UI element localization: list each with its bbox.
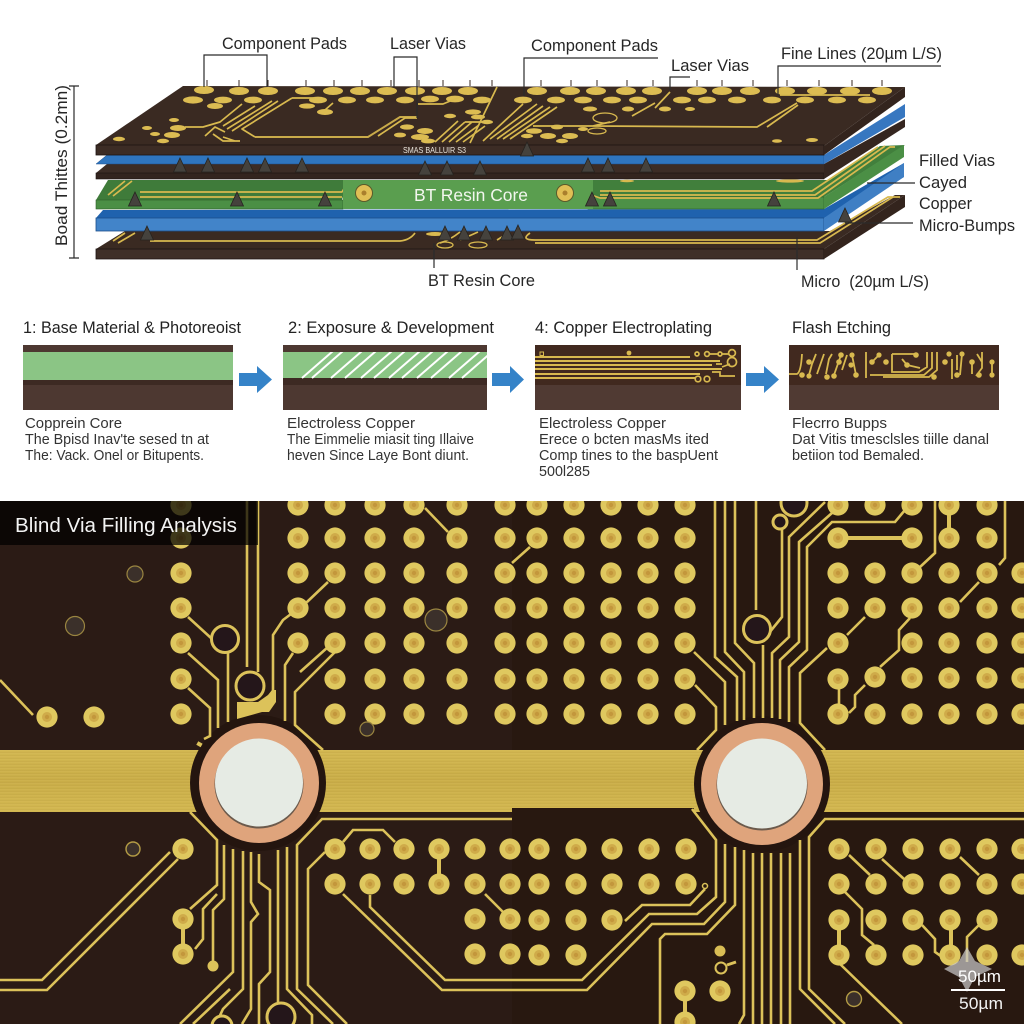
callout: BT resin core bottom: BT Resin Core — [428, 272, 535, 290]
tiny pins — [207, 80, 882, 86]
caption: step 3 — [539, 415, 719, 480]
layer: upper blue dielectric — [96, 104, 905, 164]
layer: bottom copper board — [96, 195, 905, 259]
callout: component pads left: Component Pads — [222, 35, 347, 53]
callout: micro-bumps: Micro-Bumps — [919, 217, 1015, 235]
heading: step 3: 4: Copper Electroplating — [535, 319, 712, 337]
callout: board thickness dimension — [52, 85, 79, 258]
caption: step 1: Copprein Core — [25, 415, 122, 432]
caption: step 3: Erece o bcten masMs ited — [539, 431, 709, 448]
heading: step 1: 1: Base Material & Photoreoist — [23, 319, 241, 337]
panel: step 3 — [535, 319, 741, 480]
callout: laser vias right — [670, 57, 749, 90]
label: filled vias: Filled Vias — [919, 152, 995, 170]
caption: step 3: Comp tines to the baspUent — [539, 447, 719, 464]
heading: step 4: Flash Etching — [792, 319, 891, 337]
caption: step 4 — [792, 415, 989, 464]
caption: step 3: 500l285 — [539, 463, 590, 480]
traces: upper right — [512, 490, 1005, 750]
caption: step 1 — [25, 415, 210, 464]
pads: upper right array — [526, 494, 1024, 725]
caption: step 4: Flecrro Bupps — [792, 415, 887, 432]
callout: component pads right — [524, 37, 658, 96]
layer: middle dark prepreg — [96, 119, 905, 179]
pads: upper left array — [36, 494, 516, 728]
callout: laser vias left — [390, 35, 466, 118]
arrow: step 2 to 3 — [492, 366, 524, 393]
arrow: step 1 to 2 — [239, 366, 272, 393]
traces: upper left — [0, 501, 448, 750]
label: copper: Copper — [919, 195, 973, 213]
layer: BT resin core green — [96, 145, 905, 209]
scale bar: 50µm — [959, 994, 1003, 1013]
via: filled blind via right — [701, 723, 823, 845]
arrow: step 3 to 4 — [746, 366, 779, 393]
diagram: step 4 etched traces — [789, 345, 999, 410]
scale bar — [951, 967, 1005, 1013]
callout: cayed — [867, 174, 967, 192]
label: BT Resin Core on core: BT Resin Core — [414, 185, 528, 205]
diagram: step 3 plated copper — [535, 345, 741, 410]
panel: step 1 — [23, 319, 241, 464]
scale bar: 50µm — [958, 967, 1001, 986]
via isolation rings — [190, 750, 830, 812]
callout: fine lines: Fine Lines (20µm L/S) — [781, 45, 942, 63]
title banner: Blind Via Filling Analysis — [15, 514, 237, 537]
callout: board thickness dimension: Boad Thittes (0.2mn) — [52, 85, 71, 246]
via defects upper left — [66, 566, 447, 736]
traces: lower right — [512, 809, 1024, 1024]
tiny board marking: SMAS BALLUIR S3 — [403, 146, 466, 155]
diagram: step 2 exposed photoresist — [283, 345, 493, 410]
caption: step 4: betiion tod Bemaled. — [792, 447, 924, 464]
callout: laser vias left: Laser Vias — [390, 35, 466, 53]
title banner — [0, 501, 258, 545]
layer: top board with traces and pads — [96, 80, 905, 155]
callout: laser vias right: Laser Vias — [671, 57, 749, 75]
layer stack diagram — [96, 80, 905, 259]
panel: blind via filling micrograph — [0, 490, 1024, 1024]
via: core filled left — [356, 184, 372, 202]
caption: step 3: Electroless Copper — [539, 415, 666, 432]
caption: step 2: Electroless Copper — [287, 415, 415, 432]
pads: lower right array — [528, 838, 1024, 1024]
layer: lower blue dielectric — [96, 163, 904, 231]
callout: component pads left — [204, 35, 347, 87]
caption: step 4: Dat Vitis tmesclsles tiille danal — [792, 431, 989, 448]
pads: lower left array — [172, 838, 521, 965]
diagram: step 1 cross-section — [23, 345, 233, 410]
pad rows — [113, 86, 892, 143]
scale star watermark — [944, 947, 992, 992]
panel: step 4 — [789, 319, 999, 464]
via: filled blind via left — [199, 723, 319, 843]
traces: lower left — [0, 812, 512, 1024]
caption: step 2 — [287, 415, 474, 464]
caption: step 2: heven Since Laye Bont diunt. — [287, 447, 469, 464]
via: core filled right — [556, 184, 574, 202]
via triangles — [128, 142, 852, 240]
gold plane band — [0, 750, 1024, 812]
caption: step 1: The: Vack. Onel or Bitupents. — [25, 447, 204, 464]
fine traces — [185, 98, 315, 141]
callout: BT resin core bottom — [428, 243, 535, 290]
callout: component pads right: Component Pads — [531, 37, 658, 55]
callout: fine lines — [778, 45, 942, 95]
panel: step 2 — [283, 319, 494, 464]
caption: step 1: The Bpisd Inav'te sesed tn at — [25, 431, 210, 448]
callout: micro 20um — [797, 237, 929, 291]
callout: cayed: Cayed — [919, 174, 967, 192]
callout: micro 20um: Micro (20µm L/S) — [801, 273, 929, 291]
caption: step 2: The Eimmelie miasit ting Illaive — [287, 431, 474, 448]
heading: step 2: 2: Exposure & Development — [288, 319, 494, 337]
